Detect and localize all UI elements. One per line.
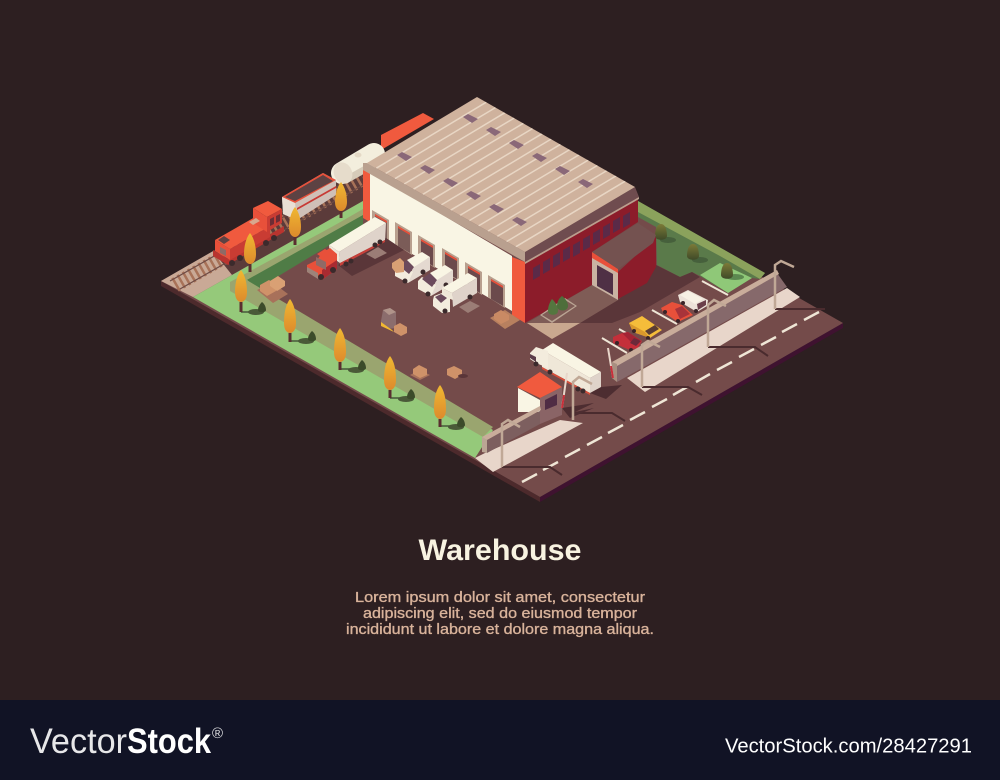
isometric warehouse site (161, 97, 843, 502)
vans at dock (395, 252, 480, 314)
lower tree 1 (235, 270, 247, 312)
pallets and boxes by docks (257, 258, 520, 329)
footer logo: ® (212, 725, 223, 742)
footer logo: Stock (127, 722, 211, 761)
boxes on yard (410, 365, 468, 380)
roof parapet (363, 163, 639, 264)
yellow car (629, 316, 662, 340)
semi truck cab (307, 248, 337, 280)
lower tree 3 (334, 328, 346, 370)
orange block behind building (381, 113, 434, 150)
lower tree 4 (384, 356, 396, 398)
red car (613, 332, 642, 352)
back garden (638, 201, 765, 293)
perimeter wall at parking (612, 270, 787, 382)
warehouse building (363, 97, 656, 323)
description text (346, 589, 654, 638)
tank wagon (330, 152, 378, 187)
footer image id: VectorStock.com/28427291 (725, 736, 972, 758)
perimeter wall at gatehouse (482, 406, 541, 453)
upper tree 2 (289, 207, 301, 245)
entrance pavement (527, 285, 618, 339)
road markings (522, 312, 819, 482)
sidewalk near parking (627, 288, 800, 392)
planter with shrubs (540, 296, 577, 323)
shrubs beside the left hedge (241, 302, 465, 430)
parking lines (602, 281, 728, 353)
van two (418, 265, 453, 296)
back bushes (655, 224, 733, 279)
barrier arms (562, 348, 613, 408)
white suv (678, 290, 708, 313)
hopper wagon (282, 173, 336, 220)
description text: incididunt ut labore et dolore magna aliqua. (346, 621, 654, 638)
forklift (381, 308, 407, 336)
footer band (0, 700, 1000, 780)
side windows (533, 212, 630, 280)
sidewalk near gatehouse (475, 420, 583, 472)
locomotive (213, 201, 284, 266)
lawn and hedges on the left (193, 201, 493, 458)
loading dock doors (372, 210, 505, 308)
semi truck at dock (307, 217, 386, 280)
description text: adipiscing elit, sed do eiusmod tempor (363, 605, 637, 622)
railway strip (161, 165, 363, 297)
description text: Lorem ipsum dolor sit amet, consectetur (355, 589, 645, 606)
gatehouse (517, 372, 562, 424)
gatehouse truck (530, 343, 622, 399)
red side wall (525, 197, 638, 323)
upper tree 1 (244, 233, 256, 272)
van one (395, 252, 430, 284)
loading plate two (459, 301, 480, 313)
lower tree 5 (434, 385, 446, 427)
orange corner pilasters (363, 170, 525, 323)
footer logo (30, 722, 223, 761)
upper tree 3 (335, 182, 347, 218)
cream front wall (370, 172, 512, 311)
building shadow on yard (580, 265, 700, 323)
trees (235, 182, 446, 427)
footer logo: Vector (30, 722, 127, 761)
shadow of parked semi truck (338, 238, 404, 276)
orange-red pickup (661, 302, 693, 323)
title: Warehouse (418, 534, 582, 567)
ground base slab (161, 107, 843, 502)
parked cars (613, 290, 708, 352)
lamp shadows on road (502, 309, 825, 475)
ribbed roof (367, 97, 635, 252)
roof skylights (397, 114, 593, 226)
loading plate (366, 247, 387, 259)
lower tree 2 (284, 299, 296, 342)
box truck (433, 273, 477, 314)
office annex (592, 223, 656, 300)
gatehouse shadow (562, 403, 594, 418)
street lamps (502, 261, 794, 467)
train (213, 152, 378, 266)
